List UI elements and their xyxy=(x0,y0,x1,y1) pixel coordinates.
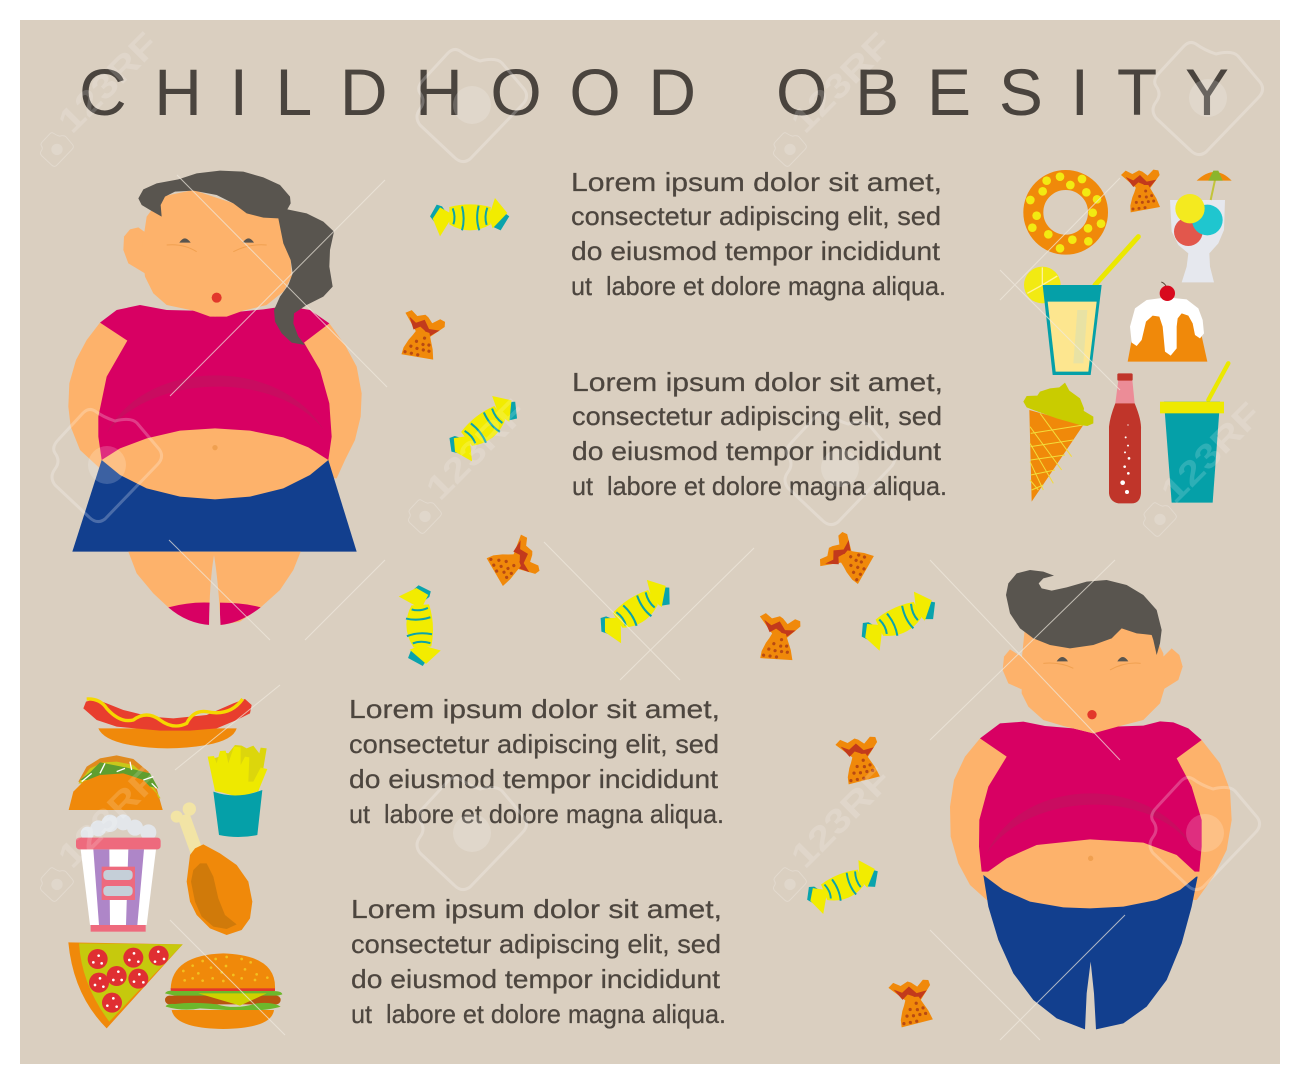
candies scattered xyxy=(392,198,944,1028)
text block: bottom two: do eiusmod tempor incididunt xyxy=(351,964,721,994)
illustration: boy xyxy=(950,570,1232,1029)
icon: drink cup xyxy=(1160,363,1228,503)
stock watermark overlay: 123RF xyxy=(51,25,166,141)
stock watermark overlay: 123RF xyxy=(784,25,899,141)
stock watermark overlay: 123RF xyxy=(1154,395,1269,511)
stock watermark overlay: 123RF xyxy=(784,760,899,876)
icon: yellow candy 5 xyxy=(854,585,944,655)
text block: bottom two xyxy=(351,894,726,1029)
illustration: girl xyxy=(68,171,362,627)
icon: lemonade xyxy=(1024,237,1138,375)
icon: orange candy 4 xyxy=(750,611,802,666)
text block: top one: ut labore et dolore magna aliqua. xyxy=(571,271,946,301)
title: CHILDHOOD xyxy=(79,55,696,129)
sweets and drinks group xyxy=(1023,170,1232,503)
text block: top two: do eiusmod tempor incididunt xyxy=(572,436,942,466)
icon: chicken drumstick xyxy=(171,802,252,935)
text block: top two: Lorem ipsum dolor sit amet, xyxy=(572,367,943,397)
icon: donut xyxy=(1026,172,1105,253)
icon: popcorn xyxy=(76,814,161,932)
icon: yellow candy 1 xyxy=(430,198,509,236)
icon: orange candy 3 xyxy=(816,530,878,592)
icon: yellow candy 4 xyxy=(591,572,680,649)
text block: bottom two: Lorem ipsum dolor sit amet, xyxy=(351,894,722,924)
icon: taco xyxy=(69,755,163,810)
title: OBESITY xyxy=(776,55,1229,129)
icon: orange candy 6 xyxy=(888,979,933,1028)
icon: ice cream cone xyxy=(1023,383,1093,502)
text block: top one: do eiusmod tempor incididunt xyxy=(571,236,941,266)
text block: bottom one: ut labore et dolore magna aliqua. xyxy=(349,799,724,829)
icon: burger xyxy=(165,953,282,1029)
text block: top two xyxy=(572,367,947,501)
icon: orange candy 5 xyxy=(835,736,880,785)
text block: bottom one: do eiusmod tempor incididunt xyxy=(349,764,719,794)
icon: pudding cake xyxy=(1128,282,1207,362)
icon: yellow candy 2 xyxy=(440,387,528,468)
text block: bottom two: consectetur adipiscing elit, sed xyxy=(351,929,721,959)
fast food group xyxy=(68,699,282,1029)
icon: wrapped candy xyxy=(1121,170,1160,212)
text block: top one xyxy=(571,167,946,301)
title xyxy=(79,55,1229,129)
stock watermark overlay: 123RF xyxy=(51,760,166,876)
text block: top one: consectetur adipiscing elit, sed xyxy=(571,201,941,231)
icon: yellow candy 6 xyxy=(801,855,885,918)
icon: orange candy 2 xyxy=(483,533,541,588)
icon: soda bottle xyxy=(1109,373,1141,503)
stock watermark overlay: 123RF xyxy=(419,392,534,508)
text block: top one: Lorem ipsum dolor sit amet, xyxy=(571,167,942,197)
text block: top two: ut labore et dolore magna aliqua. xyxy=(572,471,947,501)
icon: orange candy 1 xyxy=(392,307,447,365)
text block: bottom two: ut labore et dolore magna aliqua. xyxy=(351,999,726,1029)
icon: french fries xyxy=(208,745,267,837)
icon: ice cream sundae xyxy=(1170,171,1232,282)
icon: yellow candy 3 xyxy=(398,584,441,667)
text block: bottom one: consectetur adipiscing elit, sed xyxy=(349,729,719,759)
text block: bottom one xyxy=(349,694,724,829)
icon: pizza slice xyxy=(68,942,183,1028)
icon: hot dog xyxy=(83,699,252,748)
text block: bottom one: Lorem ipsum dolor sit amet, xyxy=(349,694,720,724)
text block: top two: consectetur adipiscing elit, sed xyxy=(572,401,942,431)
